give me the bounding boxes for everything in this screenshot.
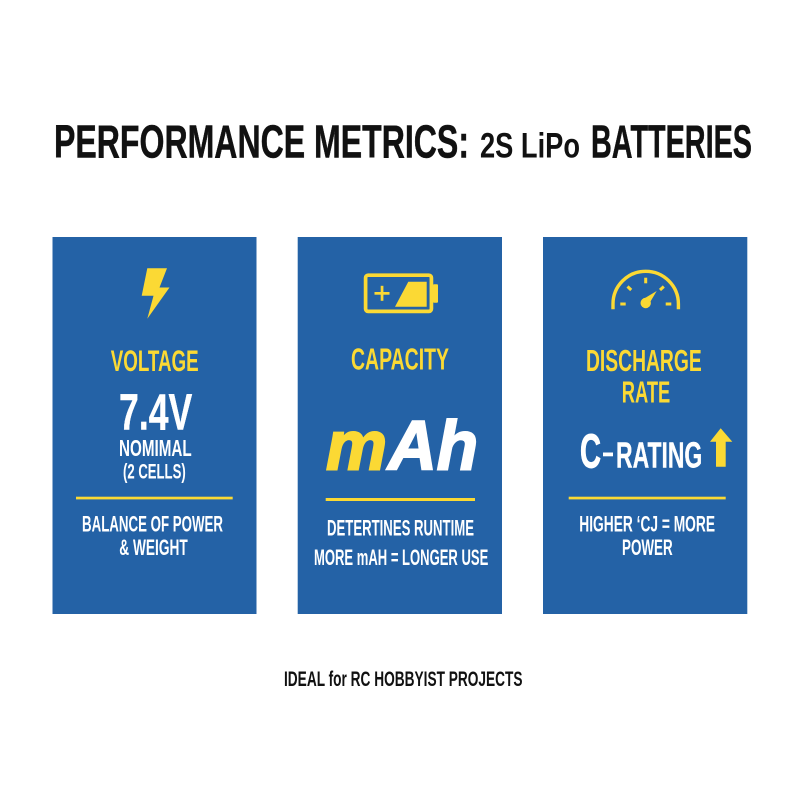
icon: lightning bolt — [142, 268, 170, 319]
description: voltage — [82, 512, 223, 560]
description: discharge rate — [579, 512, 715, 560]
description: capacity — [314, 516, 488, 570]
description: voltage: & WEIGHT — [119, 535, 188, 560]
icon: gauge — [613, 271, 678, 309]
icon: battery — [366, 275, 438, 311]
description: discharge rate: HIGHER ‘CJ = MORE — [579, 512, 715, 537]
heading: discharge rate: RATE — [622, 375, 670, 410]
icon: up arrow — [710, 428, 732, 467]
value: C-rating: RATING — [616, 434, 702, 475]
label: nominal: NOMIMAL — [119, 435, 192, 461]
heading: voltage: VOLTAGE — [111, 345, 199, 378]
value: C-rating — [580, 426, 702, 478]
title: 2S LiPo — [480, 126, 580, 166]
label: 2 cells: (2 CELLS) — [123, 461, 186, 484]
description: capacity: DETERTINES RUNTIME — [327, 516, 474, 541]
value: mAh — [326, 406, 478, 484]
description: discharge rate: POWER — [622, 535, 673, 560]
heading: capacity: CAPACITY — [351, 341, 449, 376]
value: 7.4V: 7.4V — [119, 383, 192, 440]
value: mAh: m — [326, 406, 387, 484]
value: C-rating: C — [580, 426, 601, 478]
panel: capacity — [298, 237, 502, 614]
heading: discharge rate: DISCHARGE — [586, 343, 702, 378]
value: mAh: Ah — [386, 406, 478, 484]
footer note: IDEAL for RC HOBBYIST PROJECTS — [284, 668, 522, 691]
heading: discharge rate — [586, 343, 702, 410]
description: voltage: BALANCE OF POWER — [82, 512, 223, 537]
panel: discharge rate — [543, 237, 747, 614]
title: PERFORMANCE METRICS: — [54, 116, 469, 168]
panel: voltage — [52, 237, 256, 614]
description: capacity: MORE mAH = LONGER USE — [314, 545, 488, 570]
